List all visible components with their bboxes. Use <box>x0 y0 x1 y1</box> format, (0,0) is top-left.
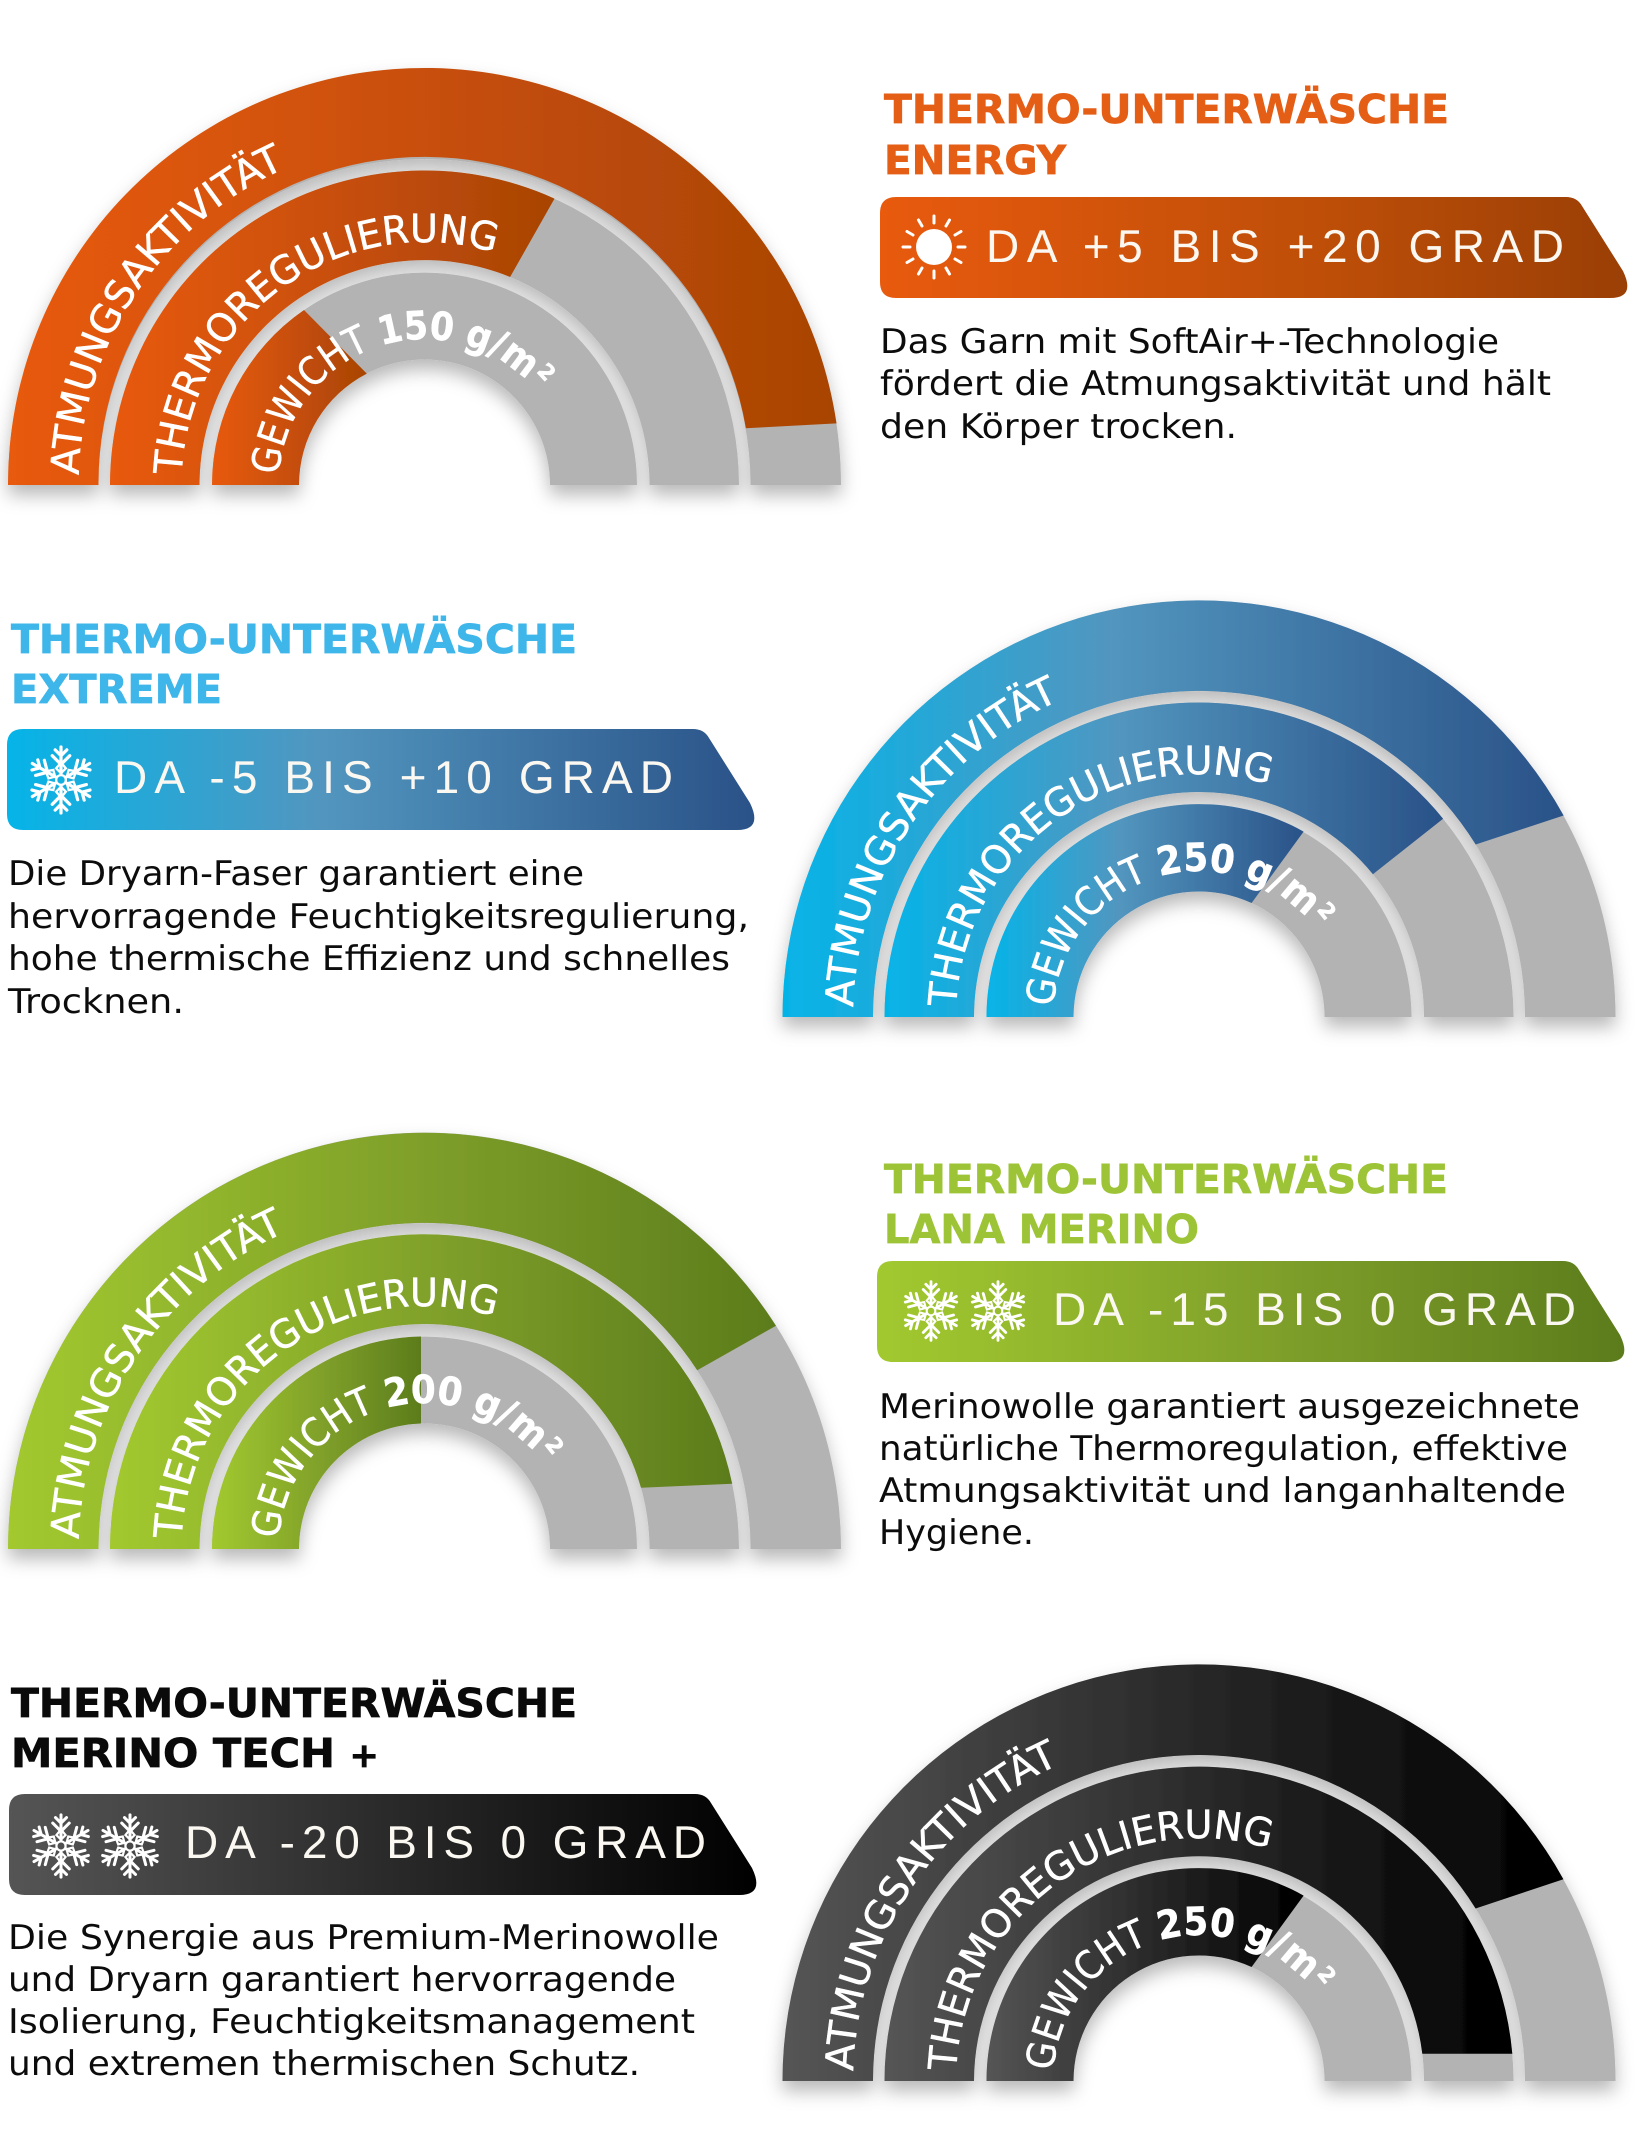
pill label: DA -20 BIS 0 GRAD <box>185 1816 706 1868</box>
description: Energy: den Körper trocken. <box>880 407 1237 447</box>
heading: Energy <box>884 85 1449 184</box>
heading: Merino Tech +: MERINO TECH + <box>11 1731 379 1777</box>
description: Merino Tech <box>8 1918 719 2084</box>
label: Gewicht 250: GEWICHT 250 g/m² <box>1026 1906 1336 2068</box>
label: Gewicht 200: GEWICHT 200 g/m² <box>252 1374 564 1536</box>
label: Thermoregulierung: THERMOREGULIERUNG <box>927 745 1272 1006</box>
description: Energy: fördert die Atmungsaktivität und hält <box>880 364 1551 404</box>
pill label: DA -15 BIS 0 GRAD <box>1053 1283 1576 1335</box>
label: Atmungsaktivität: ATMUNGSAKTIVITÄT <box>825 1738 1051 2072</box>
heading: Merino Tech +: THERMO-UNTERWÄSCHE <box>11 1679 577 1727</box>
panel: Lana Merino text <box>877 1155 1624 1553</box>
icon: snowflake <box>28 747 94 813</box>
band: Atmungsaktivität <box>782 1664 1616 2081</box>
band: Gewicht <box>986 1868 1412 2081</box>
label: Thermoregulierung: THERMOREGULIERUNG <box>927 1809 1272 2070</box>
icon: snowflake 1 <box>902 1282 960 1340</box>
description: Lana Merino: natürliche Thermoregulation, effektive <box>879 1429 1568 1469</box>
description: Extreme: hervorragende Feuchtigkeitsregulierung, <box>8 897 749 937</box>
panel: Merino Tech text <box>8 1679 756 2084</box>
description: Extreme <box>7 854 749 1022</box>
band: Atmungsaktivität 95% <box>8 68 841 485</box>
heading: Lana Merino: LANA MERINO <box>884 1207 1199 1253</box>
pill label: DA -5 BIS +10 GRAD <box>114 751 673 803</box>
band: Thermoregulierung <box>884 702 1514 1017</box>
band: Thermoregulierung <box>110 170 739 485</box>
label: Gewicht 250: GEWICHT 250 g/m² <box>1026 842 1336 1004</box>
temperature pill: Extreme <box>7 729 754 830</box>
panel: Extreme text <box>7 615 754 1022</box>
label: Atmungsaktivität: ATMUNGSAKTIVITÄT <box>825 674 1051 1008</box>
gauge bands: Merino Tech <box>782 1664 1616 2081</box>
pill label: DA +5 BIS +20 GRAD <box>986 220 1564 272</box>
description: Lana Merino: Merinowolle garantiert ausgezeichnete <box>879 1387 1580 1427</box>
temperature pill: Energy <box>880 197 1627 298</box>
description: Merino Tech: und Dryarn garantiert hervorragende <box>8 1960 676 2000</box>
description: Energy: Das Garn mit SoftAir+-Technologie <box>880 322 1499 362</box>
icon: sun <box>903 216 965 278</box>
gauge bands: Lana Merino <box>8 1133 841 1549</box>
band: Thermoregulierung <box>884 1766 1514 2081</box>
label: Atmungsaktivität: ATMUNGSAKTIVITÄT <box>50 1206 276 1540</box>
heading: Lana Merino: THERMO-UNTERWÄSCHE <box>884 1155 1448 1203</box>
panel: Merino Tech gauge <box>772 1664 1626 2102</box>
gauge bands: Extreme <box>782 600 1616 1017</box>
description: Extreme: hohe thermische Effizienz und schnelles <box>8 939 730 979</box>
band: Atmungsaktivität <box>782 600 1616 1017</box>
heading: Energy: THERMO-UNTERWÄSCHE <box>884 85 1449 133</box>
band: Thermoregulierung <box>110 1234 739 1549</box>
heading: Extreme: THERMO-UNTERWÄSCHE <box>11 615 577 663</box>
description: Merino Tech: Isolierung, Feuchtigkeitsmanagement <box>8 2002 695 2042</box>
icon: snowflake 1 <box>30 1815 92 1877</box>
icon: snowflake 2 <box>99 1815 161 1877</box>
temperature pill: Merino Tech <box>9 1794 756 1895</box>
panel: Energy gauge <box>0 68 851 506</box>
gauge bands: Energy <box>8 68 841 485</box>
label: Atmungsaktivität: ATMUNGSAKTIVITÄT <box>50 142 276 476</box>
description: Energy <box>880 322 1551 447</box>
panel: Extreme gauge <box>772 600 1626 1038</box>
band: Gewicht <box>212 273 637 485</box>
description: Merino Tech: und extremen thermischen Schutz. <box>8 2044 640 2084</box>
description: Lana Merino <box>879 1387 1580 1553</box>
band: Gewicht <box>986 804 1412 1017</box>
icon: snowflake 2 <box>969 1282 1027 1340</box>
label: Thermoregulierung: THERMOREGULIERUNG <box>152 213 498 474</box>
heading: Merino Tech + <box>11 1679 577 1777</box>
description: Lana Merino: Hygiene. <box>879 1513 1034 1553</box>
label: Gewicht 150: GEWICHT 150 g/m² <box>252 310 555 472</box>
description: Merino Tech: Die Synergie aus Premium-Merinowolle <box>8 1918 719 1958</box>
heading: Extreme: EXTREME <box>11 667 222 713</box>
description: Extreme: Trocknen. <box>7 982 184 1022</box>
description: Lana Merino: Atmungsaktivität und langanhaltende <box>879 1471 1566 1511</box>
band: Atmungsaktivität <box>8 1133 841 1549</box>
band: Gewicht <box>212 1336 637 1549</box>
panel: Lana Merino gauge <box>0 1132 851 1570</box>
label: Thermoregulierung: THERMOREGULIERUNG <box>152 1277 498 1538</box>
heading: Extreme <box>11 615 577 713</box>
description: Extreme: Die Dryarn-Faser garantiert eine <box>8 854 584 894</box>
temperature pill: Lana Merino <box>877 1261 1624 1362</box>
heading: Energy: ENERGY <box>884 138 1067 184</box>
heading: Lana Merino <box>884 1155 1448 1253</box>
panel: Energy text <box>880 85 1627 447</box>
